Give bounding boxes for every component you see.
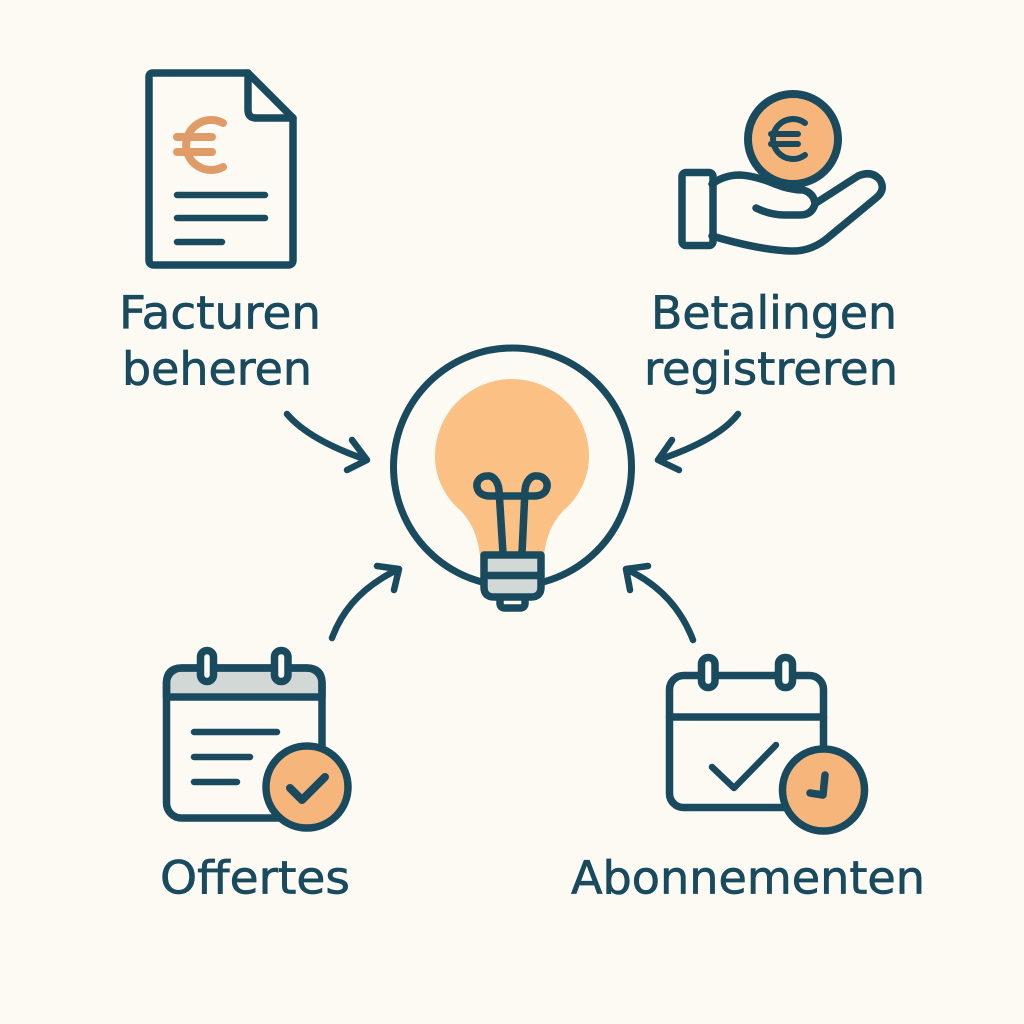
icon: calendar with check badge	[166, 650, 348, 828]
label: Facturen beheren	[119, 286, 321, 396]
icon: invoice document	[149, 73, 293, 265]
icon: calendar with clock badge	[670, 658, 864, 831]
label: Betalingen registreren: Betalingen	[651, 286, 897, 340]
label: Facturen beheren: beheren	[122, 342, 312, 396]
arrow: bottom left	[332, 566, 399, 638]
label: Betalingen registreren: registreren	[644, 342, 898, 396]
arrow: top right	[658, 414, 738, 470]
label: Facturen beheren: Facturen	[119, 286, 321, 340]
arrow: bottom right	[626, 566, 693, 640]
label: Abonnementen: Abonnementen	[571, 852, 925, 904]
label: Betalingen registreren	[644, 286, 898, 396]
icon: hand holding euro coin	[682, 94, 882, 251]
icon: central light bulb in circle	[394, 348, 632, 608]
arrow: top left	[287, 414, 367, 470]
label: Offertes: Offertes	[160, 852, 350, 904]
